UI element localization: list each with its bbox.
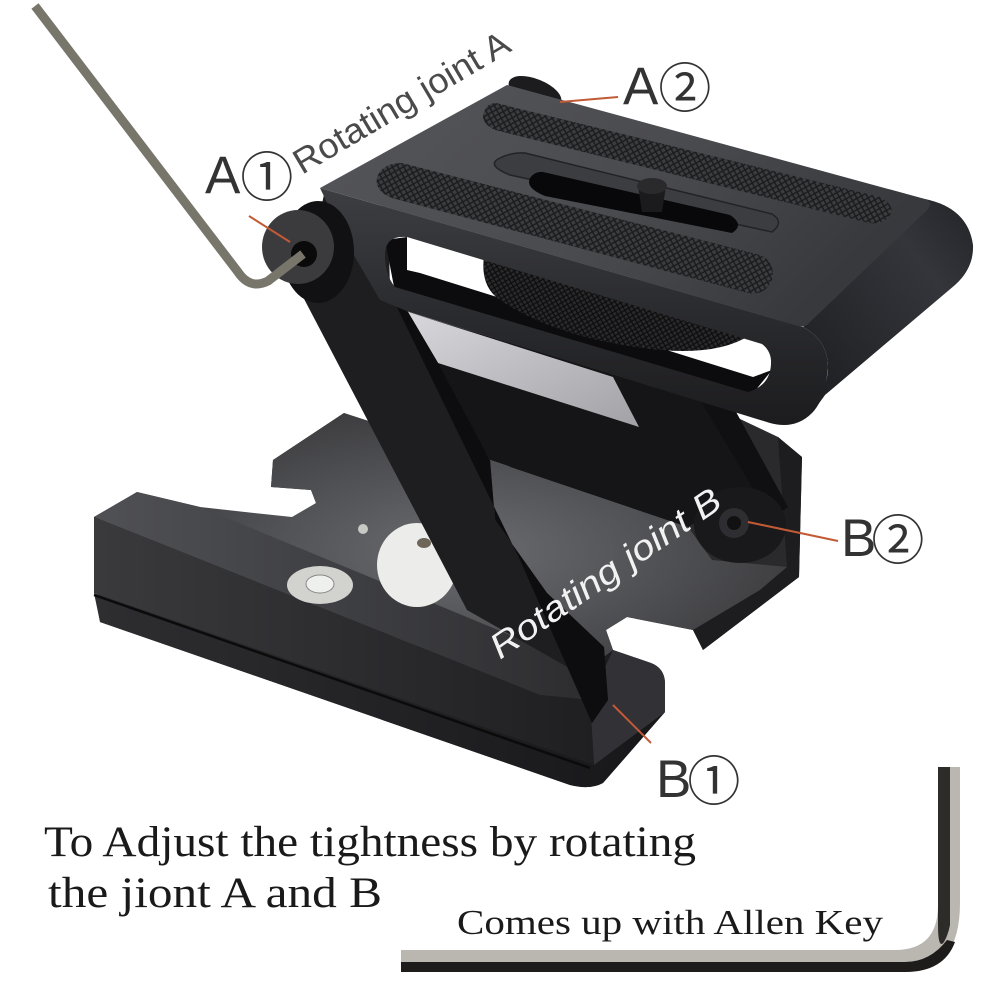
grip pad rear (483, 103, 892, 223)
base floor (137, 413, 787, 690)
top plate (320, 69, 973, 425)
leader: B1 (613, 705, 651, 743)
caption (44, 819, 696, 917)
caption: To Adjust the tightness by rotating (44, 819, 696, 866)
label: A2: A (623, 57, 658, 116)
label: A1: ① (240, 136, 293, 212)
label: B1: ① (687, 740, 740, 816)
base plate (94, 400, 802, 787)
plate front face (320, 188, 828, 425)
plate right side (803, 199, 973, 413)
knurled knob (483, 250, 750, 351)
rear arm (700, 400, 788, 520)
label: A1: A (205, 146, 240, 205)
front arm (302, 190, 608, 723)
allen key illustration (401, 767, 960, 972)
joint A1 (262, 201, 354, 303)
leader: B2 (748, 522, 838, 541)
slot back wall (385, 237, 772, 397)
label: rotating joint A: Rotating joint A (286, 23, 518, 182)
label: B2: ② (871, 499, 924, 575)
label: B1: B (656, 750, 691, 809)
centre recess (494, 153, 778, 232)
leader: A1 (249, 216, 290, 242)
caption: allen key: Comes up with Allen Key (457, 903, 884, 942)
caption: the jiont A and B (48, 870, 382, 917)
tripod screw (637, 178, 667, 212)
joint B2 (694, 487, 786, 563)
base rear surface (271, 400, 802, 650)
block top (94, 492, 590, 700)
base bottom slab (94, 593, 665, 787)
reflective panel (408, 312, 639, 427)
label: A2: ② (658, 47, 711, 123)
bubble level (287, 566, 353, 604)
groove line (94, 595, 590, 768)
rear panel (408, 312, 760, 527)
small screw (358, 524, 368, 534)
base end plate (590, 650, 665, 765)
block front (94, 517, 594, 765)
centre washer (377, 523, 457, 607)
label: B2: B (841, 509, 876, 568)
base underlay (94, 492, 665, 787)
grip pad front (377, 163, 773, 293)
label: rotating joint B: Rotating joint B (482, 480, 729, 667)
joint A2 (504, 69, 566, 115)
base right end wall (693, 437, 802, 650)
allen key in joint (35, 6, 303, 284)
centre slot (529, 172, 738, 233)
leader: A2 (560, 97, 618, 102)
plate top face (320, 85, 930, 326)
